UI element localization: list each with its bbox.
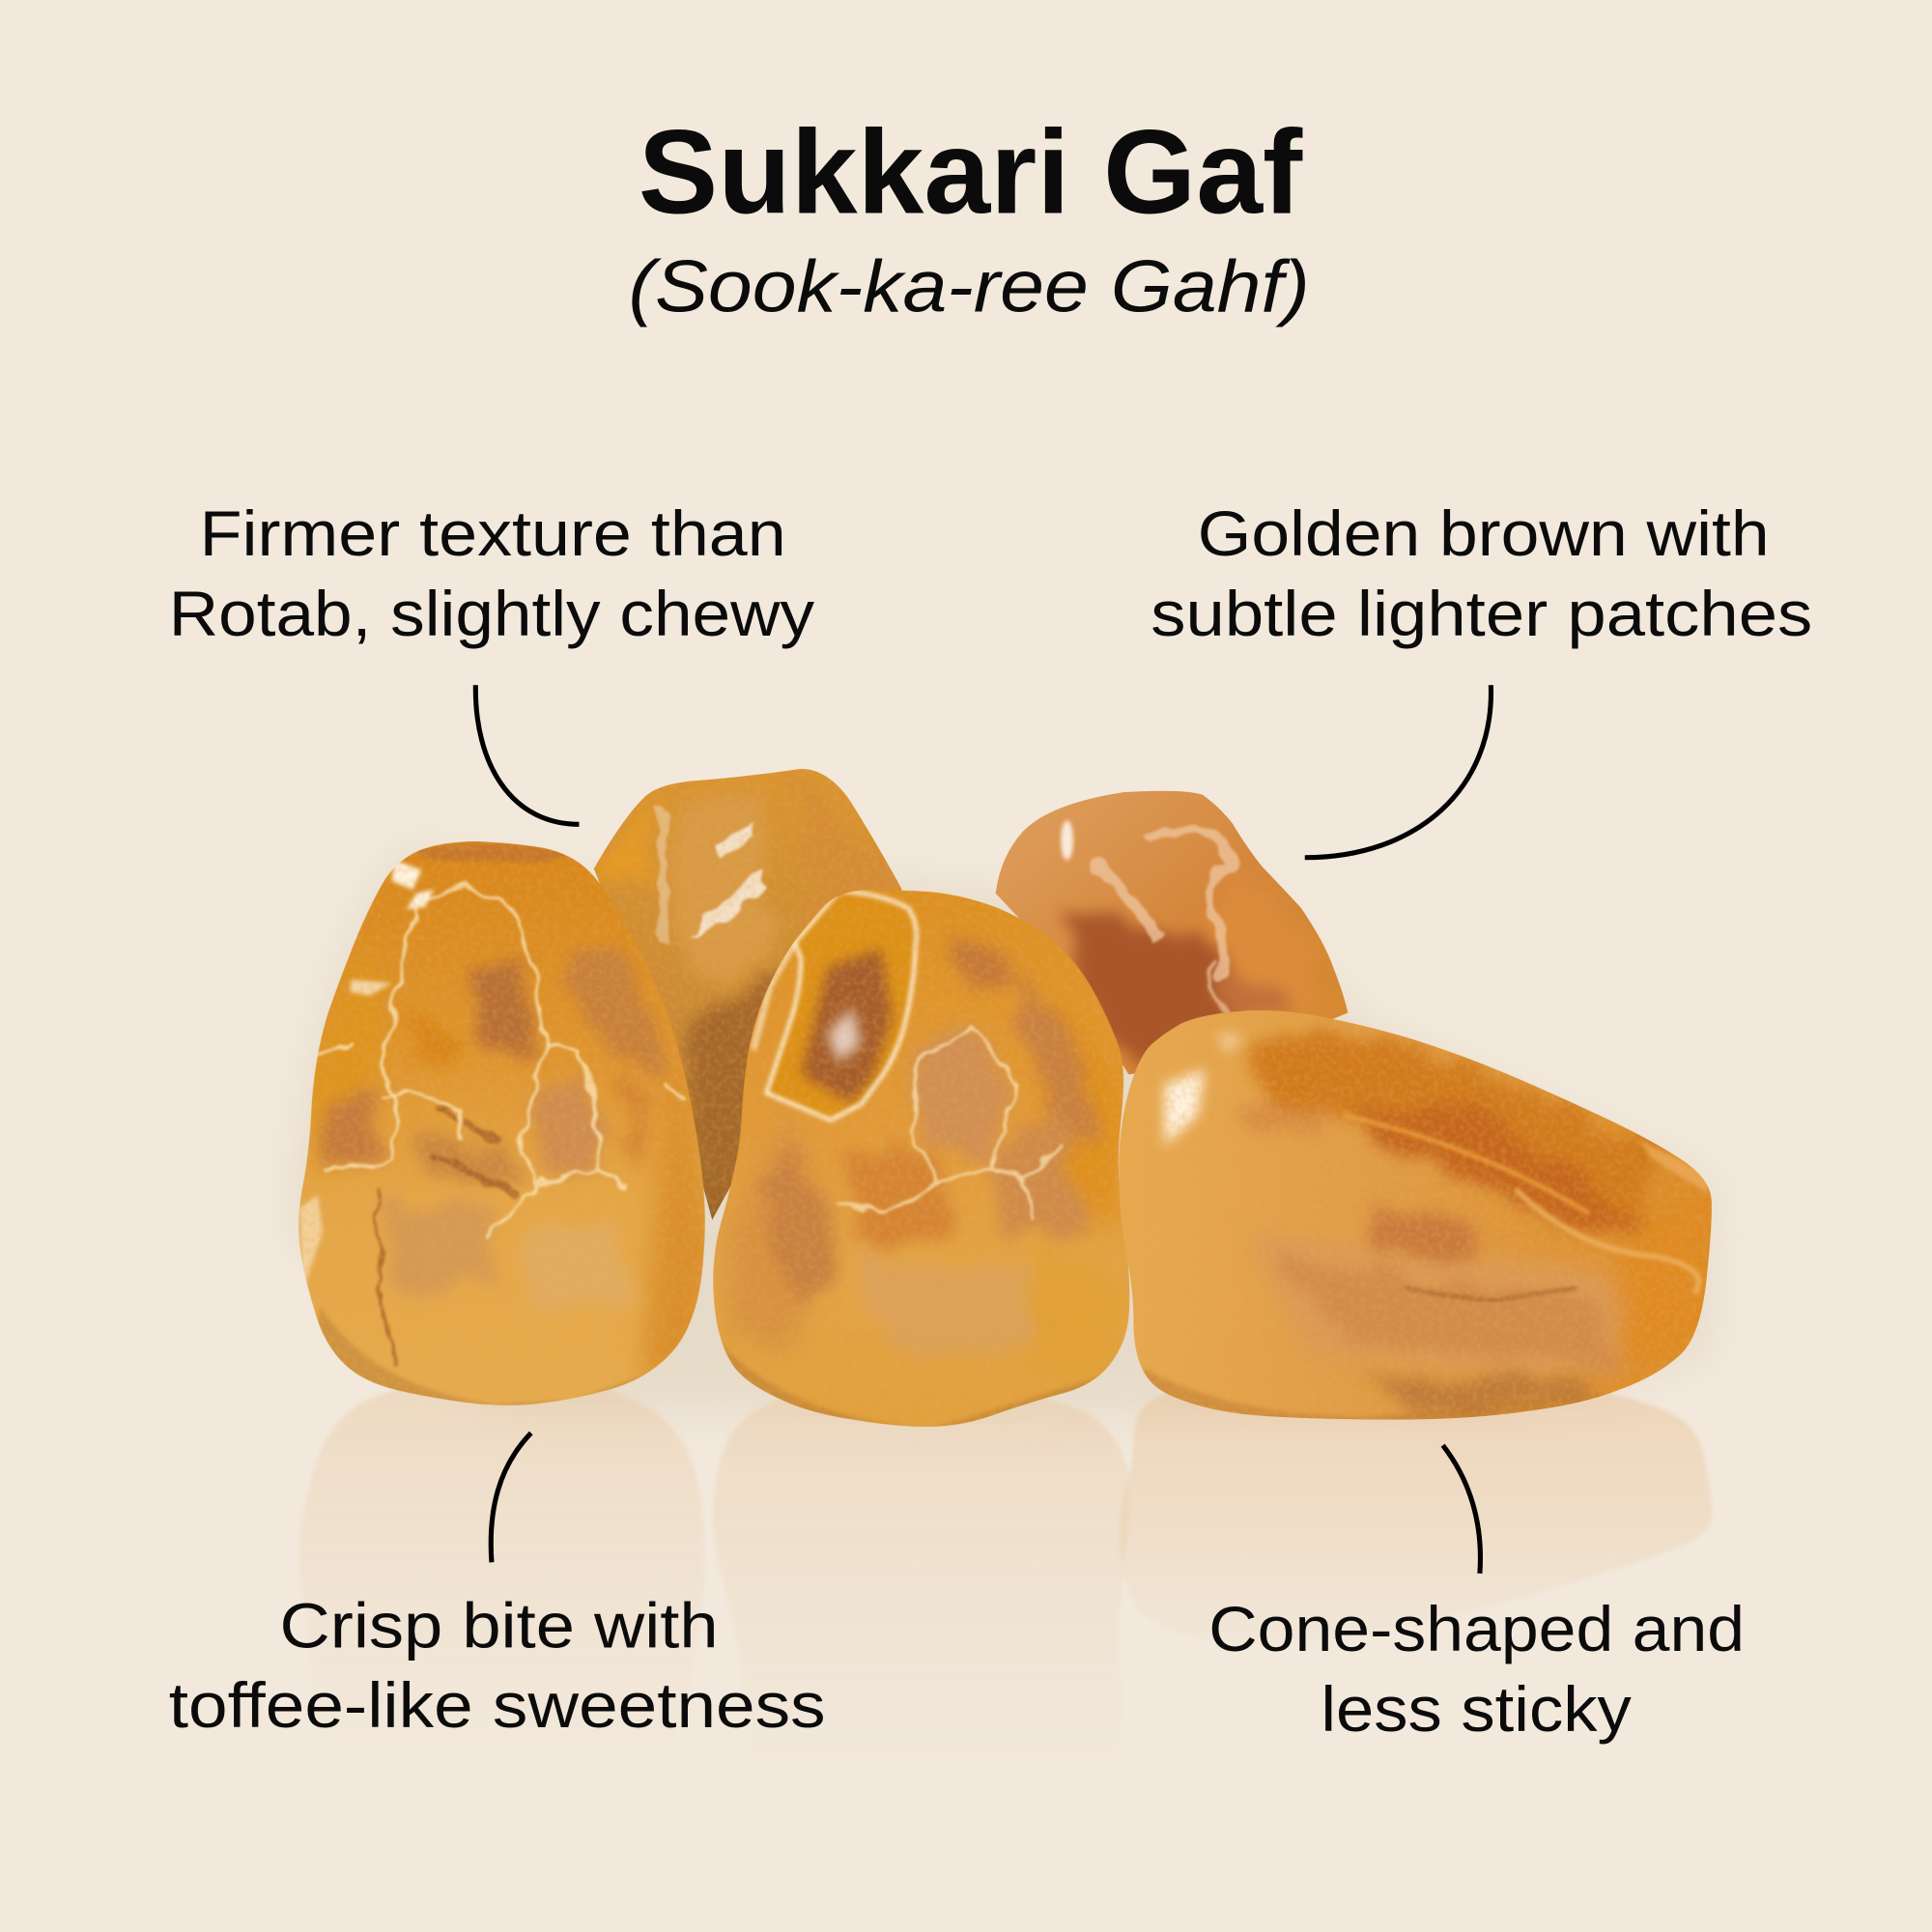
label: firmer texture: Firmer texture than xyxy=(200,498,786,570)
label: crisp bite xyxy=(169,1590,826,1742)
date: back left xyxy=(593,769,902,1220)
label: firmer texture xyxy=(169,498,815,650)
reflection of dates xyxy=(298,1370,1712,1932)
label: golden brown: Golden brown with xyxy=(1198,498,1770,570)
label: firmer texture: Rotab, slightly chewy xyxy=(169,579,815,650)
callout line: golden brown xyxy=(1305,685,1491,858)
infographic canvas xyxy=(170,127,1810,1745)
soft shadow behind dates xyxy=(296,838,1713,1417)
label: cone-shaped: Cone-shaped and xyxy=(1208,1594,1745,1665)
label: crisp bite: Crisp bite with xyxy=(280,1590,719,1662)
label: golden brown: subtle lighter patches xyxy=(1151,579,1812,650)
callout line: cone-shaped xyxy=(1443,1445,1480,1574)
label: crisp bite: toffee-like sweetness xyxy=(169,1670,826,1742)
label: cone-shaped: less sticky xyxy=(1321,1674,1633,1746)
date: front centre xyxy=(702,881,1140,1441)
label: cone-shaped xyxy=(1208,1594,1745,1746)
pronunciation subtitle: (Sook-ka-ree Gahf) xyxy=(629,246,1310,328)
callout line: crisp bite xyxy=(491,1433,531,1562)
date: front right lying xyxy=(1109,998,1719,1435)
date: front left xyxy=(290,832,715,1430)
date: back right xyxy=(995,790,1349,1074)
title: Sukkari Gaf xyxy=(639,106,1303,240)
label: golden brown xyxy=(1151,498,1812,650)
callout line: firmer texture xyxy=(475,685,579,824)
